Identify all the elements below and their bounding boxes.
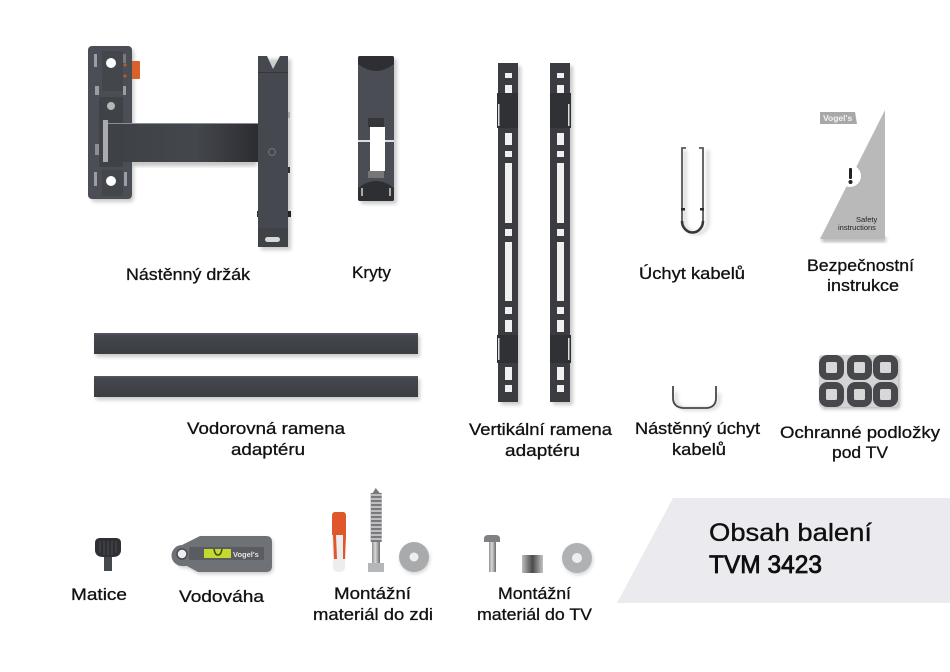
label: Vodorovná ramena adaptéru <box>187 419 346 459</box>
icon: spirit level: Vogel's <box>233 550 259 559</box>
label: Nástěnný úchyt kabelů: Nástěnný úchyt <box>635 419 760 438</box>
item: wall bracket <box>88 46 291 284</box>
label: Bezpečnostní instrukce: Bezpečnostní <box>807 256 914 275</box>
label: Vertikální ramena adaptéru <box>469 420 613 460</box>
title: Obsah balení: Obsah balení <box>709 519 872 547</box>
label: Matice: Matice <box>71 585 127 604</box>
item: protective pads <box>780 355 941 462</box>
label: Ochranné podložky pod TV <box>780 423 941 462</box>
label: Montážní materiál do TV: Montážní <box>498 584 571 603</box>
label: Montážní materiál do zdi <box>313 584 433 624</box>
panel background <box>617 498 950 603</box>
icon: dowel, screw and washer <box>332 488 430 574</box>
item: nut <box>71 538 127 604</box>
label: Vertikální ramena adaptéru: Vertikální ramena <box>469 420 613 439</box>
icon: wall cable clip <box>673 386 719 409</box>
icon: two horizontal bars <box>94 333 420 400</box>
icon: thumb nut <box>95 538 121 571</box>
item: wall mounting material <box>313 488 433 624</box>
icon: two vertical rails <box>497 63 573 405</box>
label: Vertikální ramena adaptéru: adaptéru <box>505 441 580 460</box>
label: Nástěnný úchyt kabelů <box>635 419 760 459</box>
item: safety instructions <box>807 110 914 295</box>
label: Montážní materiál do TV: materiál do TV <box>477 605 593 624</box>
icon: wall bracket with arm <box>88 46 291 250</box>
item: wall cable clip <box>635 386 760 459</box>
icon: safety instructions booklet: Safety <box>856 215 878 224</box>
icon: safety instructions booklet <box>820 110 886 242</box>
label: Ochranné podložky pod TV: Ochranné podložky <box>780 423 941 442</box>
icon: safety instructions booklet: Vogel's <box>823 113 853 123</box>
label: Vodorovná ramena adaptéru: Vodorovná ramena <box>187 419 346 438</box>
title: TVM 3423: TVM 3423 <box>709 551 822 579</box>
item: covers <box>352 56 397 282</box>
icon: bolt, spacer and washer <box>484 535 593 575</box>
icon: U-shaped cable clip <box>681 148 708 234</box>
label: Montážní materiál do zdi: materiál do zdi <box>313 605 433 624</box>
label: Montážní materiál do TV <box>477 584 593 624</box>
panel: package title <box>617 498 950 603</box>
icon: six protective pads <box>819 355 900 409</box>
label: Ochranné podložky pod TV: pod TV <box>832 443 889 462</box>
item: vertical adapter arms <box>469 63 613 460</box>
label: Montážní materiál do zdi: Montážní <box>334 584 411 603</box>
label: Nástěnný úchyt kabelů: kabelů <box>672 440 726 459</box>
label: Vodorovná ramena adaptéru: adaptéru <box>231 440 305 459</box>
label: Bezpečnostní instrukce: instrukce <box>827 276 899 295</box>
label: Kryty: Kryty <box>352 263 391 282</box>
label: Vodováha: Vodováha <box>179 587 265 606</box>
item: TV mounting material <box>477 535 593 624</box>
item: spirit level <box>172 536 273 606</box>
label: Úchyt kabelů: Úchyt kabelů <box>639 264 745 283</box>
icon: cover plate <box>358 56 397 204</box>
label: Nástěnný držák: Nástěnný držák <box>126 265 251 284</box>
label: Bezpečnostní instrukce <box>807 256 914 295</box>
item: cable clip <box>639 148 745 283</box>
icon: safety instructions booklet: instructions <box>838 223 876 232</box>
item: horizontal adapter arms <box>94 333 420 459</box>
